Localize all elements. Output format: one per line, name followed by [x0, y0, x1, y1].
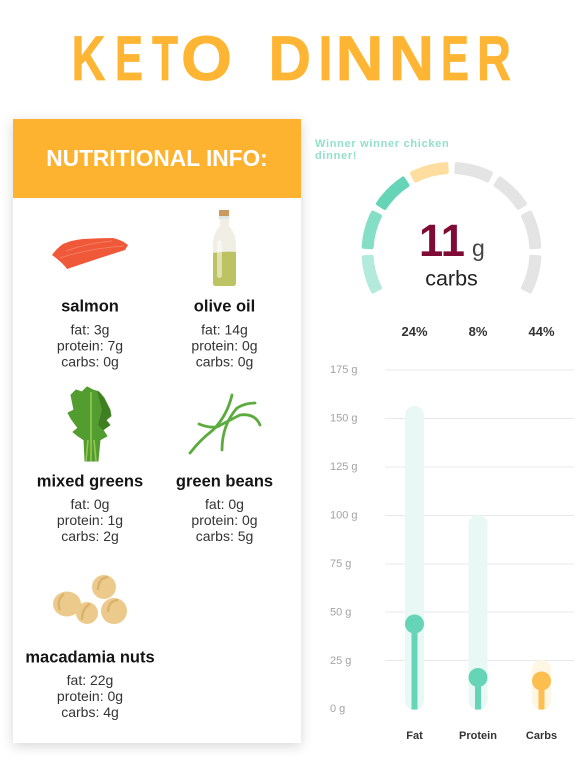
bar: fat [405, 406, 424, 710]
chart: x axis labels [406, 730, 557, 742]
caption: winner: Winner winner chicken [315, 138, 449, 150]
item: salmon: salmon [61, 298, 119, 316]
icon: mixed greens [68, 387, 111, 461]
panel header: NUTRITIONAL INFO: [46, 145, 268, 171]
title: R [477, 24, 511, 94]
gauge: value: carbs [425, 267, 478, 291]
item: mixed greens: mixed greens [37, 472, 143, 490]
chart: y axis labels: 125 g [330, 461, 358, 473]
item: macadamia nuts: carbs: 4g [61, 704, 119, 720]
item: salmon: fat: 3g [71, 322, 109, 338]
gauge: value: g [472, 235, 485, 261]
title: N [336, 24, 384, 94]
item: mixed greens [37, 472, 143, 544]
title: E [115, 24, 143, 94]
item: macadamia nuts [25, 648, 155, 720]
panel: nutritional info [13, 119, 301, 743]
chart: y axis labels: 100 g [330, 510, 358, 522]
bar chart [330, 364, 574, 742]
item: olive oil: olive oil [194, 298, 255, 316]
gauge: value: 11 [419, 215, 465, 266]
title: T [152, 24, 178, 94]
chart: y axis labels [330, 364, 358, 715]
gauge: value [419, 215, 485, 291]
chart: x axis labels: Protein [459, 730, 497, 742]
item: olive oil: fat: 14g [201, 322, 248, 338]
item: olive oil [191, 298, 258, 370]
chart: y axis labels: 0 g [330, 703, 345, 715]
title [72, 24, 511, 94]
percentages: 44% [528, 324, 555, 339]
item: olive oil: protein: 0g [191, 338, 258, 354]
gauge: segments [364, 164, 539, 291]
chart: x axis labels: Fat [406, 730, 423, 742]
chart: y axis labels: 50 g [330, 606, 351, 618]
chart: x axis labels: Carbs [526, 730, 557, 742]
item: macadamia nuts: fat: 22g [67, 672, 113, 688]
item: mixed greens: carbs: 2g [61, 528, 119, 544]
percentages: 8% [469, 324, 488, 339]
bar: protein [468, 515, 488, 710]
chart: y axis labels: 25 g [330, 655, 351, 667]
item: salmon: protein: 7g [57, 338, 123, 354]
chart: y axis labels: 75 g [330, 558, 351, 570]
icon: macadamia nuts [53, 575, 127, 624]
icon: green beans [190, 395, 260, 453]
item: salmon: carbs: 0g [61, 354, 119, 370]
title: K [72, 24, 106, 94]
percentages: 24% [401, 324, 428, 339]
item: green beans [176, 472, 273, 544]
item: green beans: protein: 0g [191, 512, 258, 528]
item: green beans: fat: 0g [205, 496, 244, 512]
item: mixed greens: fat: 0g [71, 496, 109, 512]
item: olive oil: carbs: 0g [196, 354, 253, 370]
title: D [268, 24, 311, 94]
title: N [389, 24, 434, 94]
bar: carbs [532, 660, 551, 710]
gauge [364, 164, 539, 291]
icon: salmon [52, 238, 128, 269]
item: salmon [57, 298, 123, 370]
panel header [13, 119, 301, 198]
chart: y axis labels: 150 g [330, 412, 358, 424]
item: green beans: carbs: 5g [196, 528, 253, 544]
title: O [181, 24, 232, 94]
item: macadamia nuts: protein: 0g [57, 688, 123, 704]
title: I [318, 24, 332, 94]
caption: winner: dinner! [315, 150, 357, 162]
item: macadamia nuts: macadamia nuts [25, 648, 155, 666]
percentages [401, 324, 555, 339]
icon: olive oil [213, 210, 236, 286]
chart: y axis labels: 175 g [330, 364, 358, 376]
item: mixed greens: protein: 1g [57, 512, 123, 528]
item: green beans: green beans [176, 472, 273, 490]
title: E [441, 24, 469, 94]
